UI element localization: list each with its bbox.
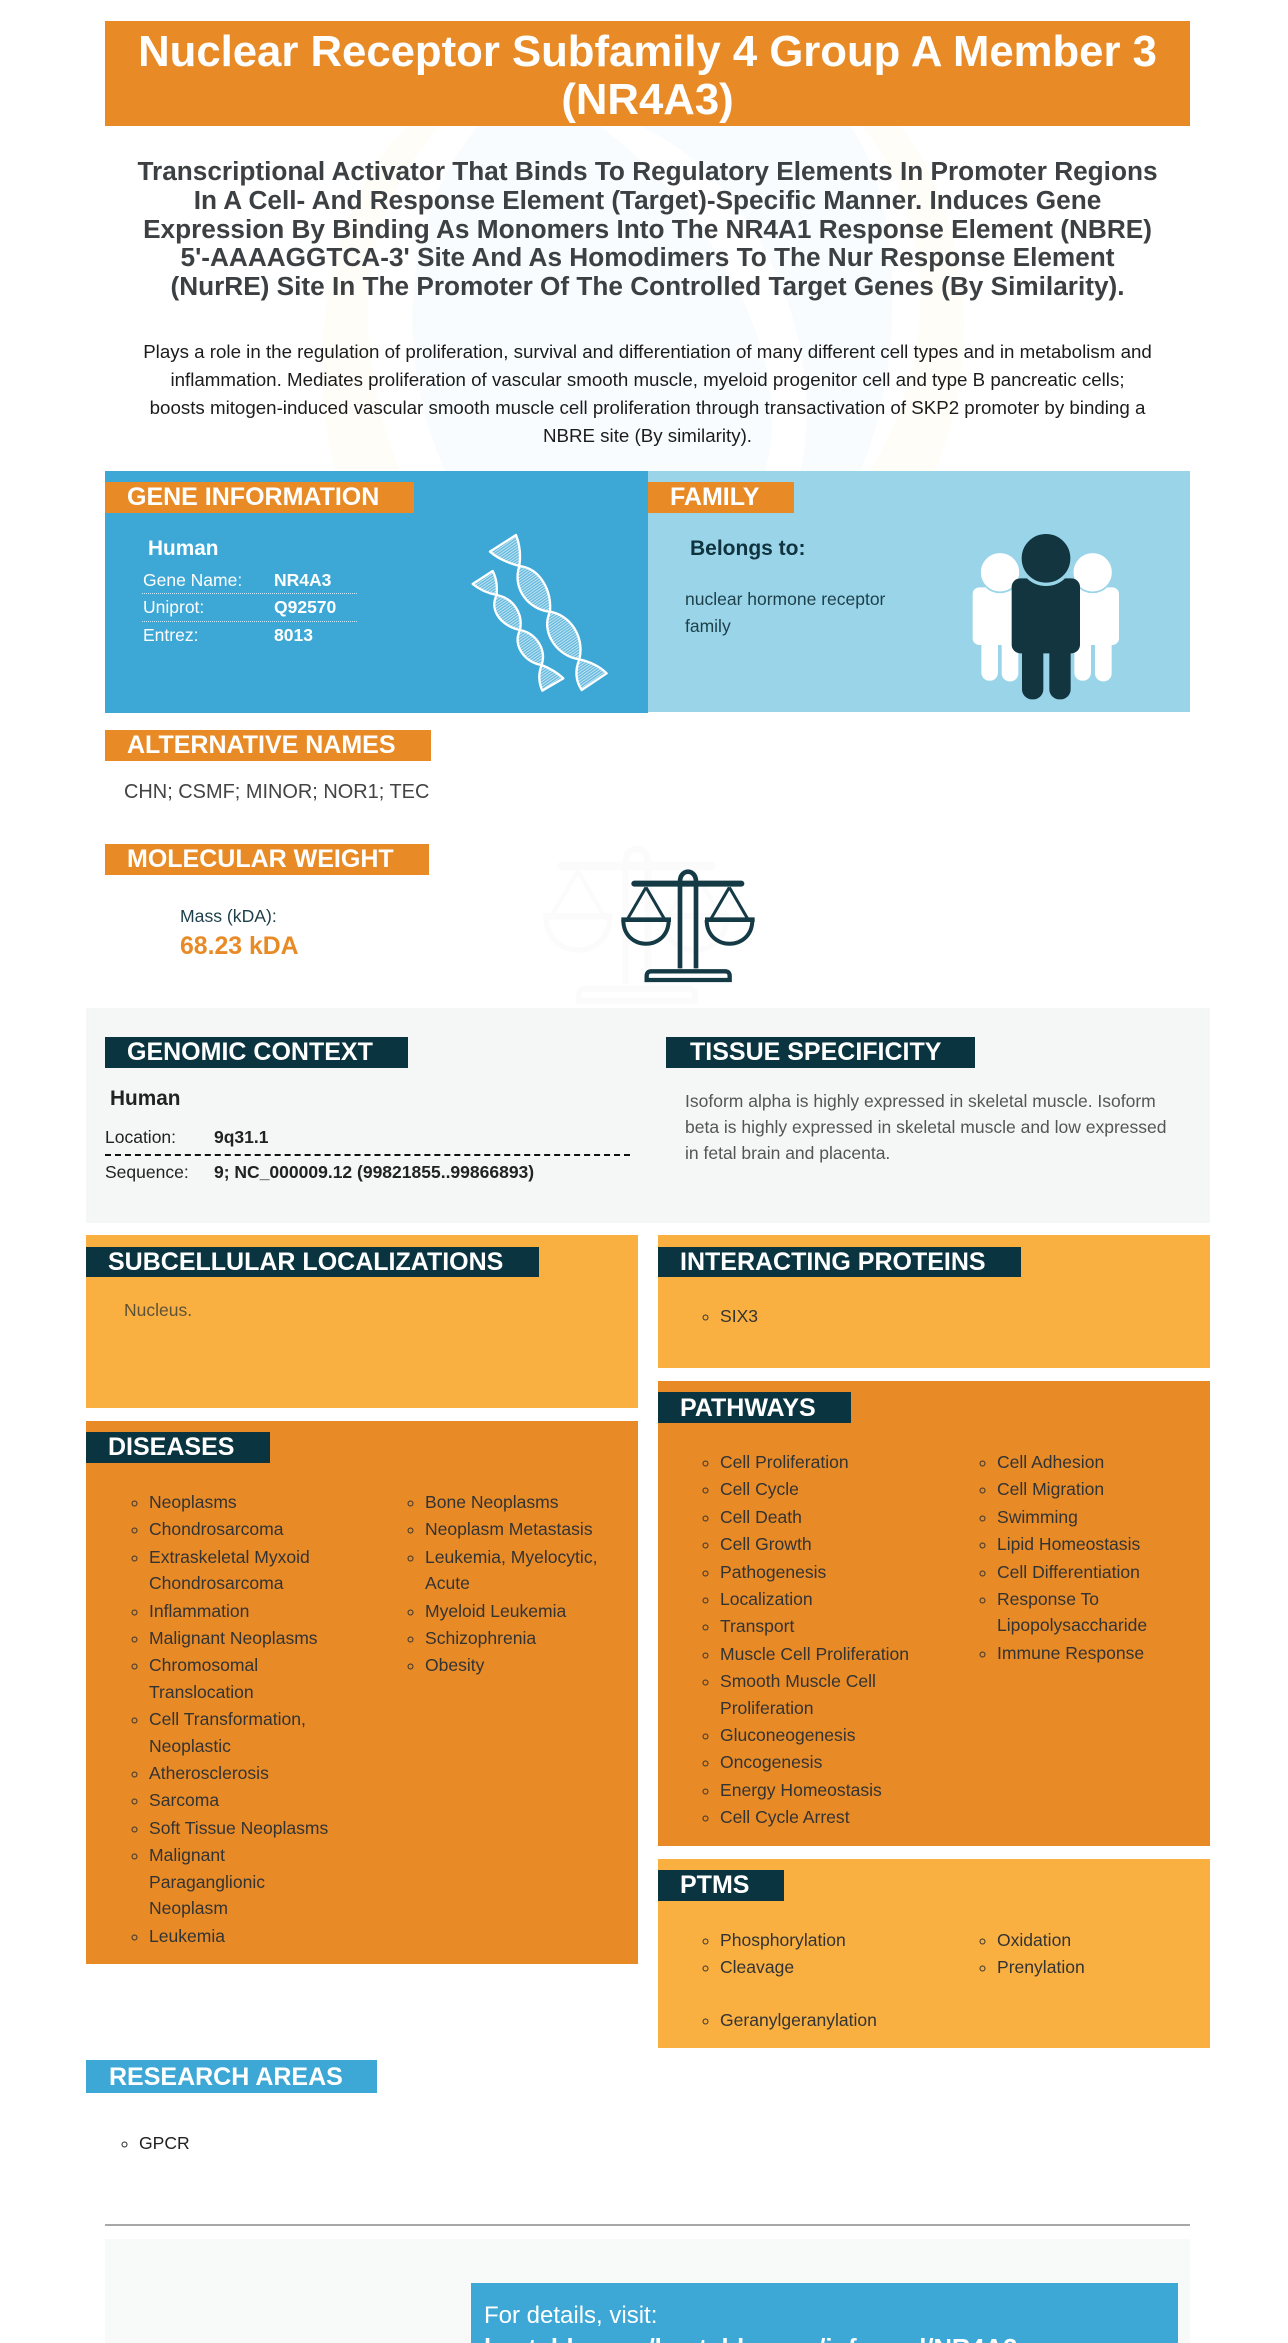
pathways list column 1: Cell Growth <box>720 1534 812 1554</box>
diseases list column 1: Cell Transformation, <box>149 1709 306 1729</box>
entrez row <box>143 625 313 645</box>
diseases list column 2: Bone Neoplasms <box>425 1492 559 1512</box>
pathways list column 1: Energy Homeostasis <box>720 1780 882 1800</box>
uniprot row: Uniprot: <box>143 597 204 617</box>
panel: gene information: 8013 <box>274 625 313 645</box>
details label: For details, visit: <box>484 2302 657 2329</box>
species label: Human <box>110 1087 180 1110</box>
heading: diseases <box>86 1432 270 1463</box>
heading: diseases: DISEASES <box>108 1433 234 1461</box>
description paragraph: inflammation. Mediates proliferation of vascular smooth muscle, myeloid progenitor cell and type B pancreatic cells; <box>170 369 1125 390</box>
panel: interacting proteins <box>658 1235 1210 1368</box>
pathways list column 1 <box>702 1452 909 1827</box>
diseases list column 2: Leukemia, Myelocytic, <box>425 1547 597 1567</box>
sequence row <box>105 1162 534 1182</box>
pathways list column 1: Gluconeogenesis <box>720 1725 855 1745</box>
pathways list column 1: Cell Death <box>720 1507 802 1527</box>
pathways list column 1: Oncogenesis <box>720 1752 822 1772</box>
mass value: 68.23 kDA <box>180 933 299 960</box>
description paragraph: Plays a role in the regulation of proliferation, survival and differentiation of many different cell types and in metabolism and <box>143 341 1152 362</box>
location row: Location: <box>105 1127 176 1147</box>
panel: gene information: NR4A3 <box>274 570 331 590</box>
gene name row: Gene Name: <box>143 570 242 590</box>
family text: nuclear hormone receptor <box>685 589 885 609</box>
heading: family: FAMILY <box>670 483 759 511</box>
diseases list column 2: Schizophrenia <box>425 1628 536 1648</box>
diseases list column 1: Inflammation <box>149 1601 249 1621</box>
diseases list column 1: Sarcoma <box>149 1790 219 1810</box>
heading: genomic context: GENOMIC CONTEXT <box>127 1038 373 1066</box>
tissue specificity text <box>685 1091 1167 1163</box>
subtitle: Transcriptional Activator That Binds To Regulatory Elements In Promoter Regions <box>137 156 1158 186</box>
PTMs list column 1: Phosphorylation <box>720 1930 846 1950</box>
pathways list column 2: Cell Adhesion <box>997 1452 1104 1472</box>
diseases list column 1: Chondrosarcoma <box>149 1573 283 1593</box>
entrez row: Entrez: <box>143 625 198 645</box>
diseases list column 1: Soft Tissue Neoplasms <box>149 1818 328 1838</box>
pathways list column 1: Localization <box>720 1589 813 1609</box>
diseases list column 1: Atherosclerosis <box>149 1763 269 1783</box>
pathways list column 2: Cell Differentiation <box>997 1562 1140 1582</box>
pathways list column 1: Muscle Cell Proliferation <box>720 1644 909 1664</box>
panel: genomic context and tissue specificity: 9q31.1 <box>214 1127 268 1147</box>
pathways list column 2: Immune Response <box>997 1643 1144 1663</box>
panel: genomic context and tissue specificity <box>86 1008 1210 1223</box>
heading: family <box>648 482 794 513</box>
pathways list column 2: Lipopolysaccharide <box>997 1615 1147 1635</box>
pathways list column 2: Response To <box>997 1589 1099 1609</box>
pathways list column 1: Pathogenesis <box>720 1562 826 1582</box>
pathways list column 1: Smooth Muscle Cell <box>720 1671 876 1691</box>
subtitle: In A Cell- And Response Element (Target)-Specific Manner. Induces Gene <box>194 185 1101 215</box>
panel: footer <box>105 2239 1190 2343</box>
description paragraph: NBRE site (By similarity). <box>543 425 752 446</box>
pathways list column 2: Lipid Homeostasis <box>997 1534 1140 1554</box>
interacting proteins list: SIX3 <box>720 1306 758 1326</box>
description paragraph <box>143 341 1152 446</box>
pathways list column 2: Cell Migration <box>997 1479 1104 1499</box>
diseases list column 2: Myeloid Leukemia <box>425 1601 566 1621</box>
pathways list column 1: Proliferation <box>720 1698 814 1718</box>
pathways list column 1: Cell Cycle Arrest <box>720 1807 850 1827</box>
PTMs list column 1 <box>702 1930 846 1977</box>
pathways list column 1: Cell Proliferation <box>720 1452 849 1472</box>
title <box>105 21 1190 126</box>
panel: subcellular localizations <box>86 1235 638 1408</box>
diseases list column 2: Neoplasm Metastasis <box>425 1519 593 1539</box>
tissue specificity text: Isoform alpha is highly expressed in skeletal muscle. Isoform <box>685 1091 1156 1111</box>
species label: Human <box>148 537 218 560</box>
heading: tissue specificity: TISSUE SPECIFICITY <box>690 1038 941 1066</box>
diseases list column 1: Neoplasm <box>149 1898 228 1918</box>
background watermark <box>0 0 1288 1010</box>
title: Nuclear Receptor Subfamily 4 Group A Member 3 <box>138 27 1157 76</box>
panel: genomic context and tissue specificity: 9; NC_000009.12 (99821855..99866893) <box>214 1162 534 1182</box>
subtitle: Expression By Binding As Monomers Into The NR4A1 Response Element (NBRE) <box>143 214 1152 244</box>
panel: family <box>648 471 1190 712</box>
heading: PTMs <box>658 1870 784 1901</box>
title: (NR4A3) <box>561 75 734 124</box>
diseases list column 1: Chondrosarcoma <box>149 1519 283 1539</box>
pathways list column 1: Cell Cycle <box>720 1479 799 1499</box>
diseases list column 1: Neoplastic <box>149 1736 231 1756</box>
PTMs list column 2 <box>980 1930 1085 1977</box>
subcellular text: Nucleus. <box>124 1300 192 1320</box>
family text <box>685 589 886 636</box>
heading: gene information: GENE INFORMATION <box>127 483 379 511</box>
panel: PTMs <box>658 1859 1210 2048</box>
alternative names text: CHN; CSMF; MINOR; NOR1; TEC <box>124 781 429 803</box>
heading: pathways: PATHWAYS <box>680 1394 816 1422</box>
panel: diseases <box>86 1421 638 1964</box>
subtitle: 5'-AAAAGGTCA-3' Site And As Homodimers To The Nur Response Element <box>180 242 1114 272</box>
sequence row: Sequence: <box>105 1162 189 1182</box>
heading: research areas: RESEARCH AREAS <box>109 2063 343 2091</box>
PTMs list column 2: Oxidation <box>997 1930 1071 1950</box>
pathways list column 2 <box>980 1452 1147 1663</box>
diseases list column 2 <box>408 1492 597 1675</box>
description paragraph: boosts mitogen-induced vascular smooth muscle cell proliferation through transactivation of SKP2 promoter by binding a <box>150 397 1145 418</box>
diseases list column 1 <box>132 1492 328 1946</box>
diseases list column 2: Acute <box>425 1573 470 1593</box>
heading: pathways <box>658 1392 851 1423</box>
panel: gene information <box>105 471 648 713</box>
diseases list column 1: Translocation <box>149 1682 254 1702</box>
pathways list column 1: Transport <box>720 1616 794 1636</box>
diseases list column 1: Malignant <box>149 1845 225 1865</box>
gene name row <box>143 570 331 590</box>
diseases list column 2: Obesity <box>425 1655 484 1675</box>
heading: research areas <box>86 2060 377 2093</box>
diseases list column 1: Extraskeletal Myxoid <box>149 1547 310 1567</box>
location row <box>105 1127 268 1147</box>
heading: PTMs: PTMS <box>680 1871 749 1899</box>
heading: subcellular localizations: SUBCELLULAR LOCALIZATIONS <box>108 1248 503 1276</box>
subtitle <box>137 156 1158 301</box>
pathways list column 2: Swimming <box>997 1507 1078 1527</box>
tissue specificity text: beta is highly expressed in skeletal muscle and low expressed <box>685 1117 1167 1137</box>
tissue specificity text: in fetal brain and placenta. <box>685 1143 890 1163</box>
PTMs list column 2: Prenylation <box>997 1957 1085 1977</box>
diseases list column 1: Neoplasms <box>149 1492 237 1512</box>
subtitle: (NurRE) Site In The Promoter Of The Controlled Target Genes (By Similarity). <box>170 271 1125 301</box>
research areas list: GPCR <box>139 2133 190 2153</box>
icon: DNA helices <box>472 534 608 692</box>
callout: details link <box>471 2283 1178 2343</box>
family text: family <box>685 616 731 636</box>
mass label: Mass (kDA): <box>180 906 277 926</box>
diseases list column 1: Paraganglionic <box>149 1872 265 1892</box>
icon: balance scale <box>621 869 755 982</box>
heading: molecular weight: MOLECULAR WEIGHT <box>127 845 394 873</box>
heading: alternative names: ALTERNATIVE NAMES <box>127 731 396 759</box>
diseases list column 1: Chromosomal <box>149 1655 258 1675</box>
diseases list column 1: Leukemia <box>149 1926 225 1946</box>
panel: pathways <box>658 1381 1210 1846</box>
uniprot row <box>143 597 336 617</box>
icon: family people <box>972 534 1119 700</box>
heading: interacting proteins: INTERACTING PROTEINS <box>680 1248 986 1276</box>
belongs to label: Belongs to: <box>690 537 806 560</box>
diseases list column 1: Malignant Neoplasms <box>149 1628 318 1648</box>
panel: gene information: Q92570 <box>274 597 336 617</box>
PTMs list extra row: Geranylgeranylation <box>720 2010 877 2030</box>
PTMs list column 1: Cleavage <box>720 1957 794 1977</box>
